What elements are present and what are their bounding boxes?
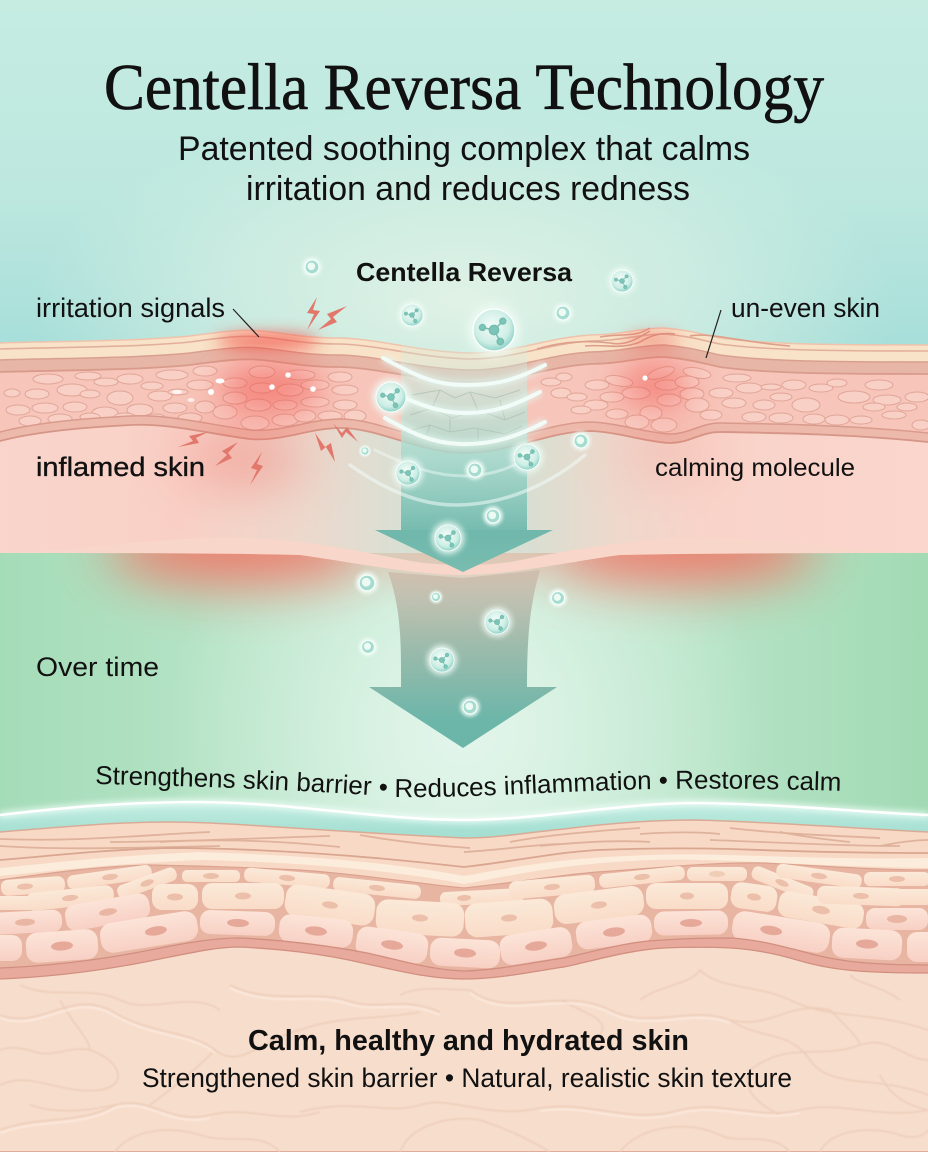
flaky ridges on uneven skin — [537, 328, 790, 349]
label: inflamed skin: inflamed skin — [36, 452, 205, 482]
red inflammation glows — [183, 333, 711, 480]
result details: Strengthened skin barrier • Natural, realistic skin texture — [142, 1063, 792, 1093]
label: irritation signals: irritation signals — [36, 293, 225, 323]
red glow at top of green panel — [105, 512, 820, 585]
skin layer: dark band — [0, 345, 928, 573]
subtitle — [178, 130, 750, 208]
icon: molecules and bubbles — [302, 257, 636, 717]
white inflammation particles — [172, 372, 648, 402]
label: Centella Reversa: Centella Reversa — [356, 257, 573, 287]
label: un-even skin: un-even skin — [731, 293, 880, 323]
epidermis cells — [4, 364, 928, 432]
healthy skin: cream highlight — [0, 852, 928, 884]
icon: lightning bolts for irritation — [178, 297, 358, 485]
title: Centella Reversa Technology — [104, 51, 824, 124]
panel: healthy skin cross-section — [0, 820, 928, 990]
panel: irritated skin cross-section — [0, 328, 928, 585]
healthy skin: fibre lines — [0, 828, 928, 852]
healthy skin: cells — [0, 863, 928, 969]
skin layer: cream surface — [0, 328, 928, 556]
faded cell outlines inside the shaft — [405, 390, 525, 446]
healthy skin: cell bed — [0, 863, 928, 990]
skin wrinkle texture — [0, 970, 928, 1152]
white wave glow — [383, 358, 545, 444]
panel: green over-time section — [0, 553, 928, 853]
label: Over time: Over time — [36, 652, 159, 682]
healthy skin: surface layer — [0, 820, 928, 990]
calming wave arrow: upper shaft — [401, 340, 527, 532]
healthy skin: stripe line — [0, 848, 928, 867]
pointer line: un-even skin — [706, 310, 721, 358]
label: calming molecule: calming molecule — [655, 454, 855, 482]
curved benefits text: Strengthens skin barrier • Reduces inflammation • Restores calm — [96, 766, 840, 798]
background: teal upper panel — [0, 0, 928, 420]
pink crescent divider — [0, 538, 928, 575]
skin layer: basal band — [0, 416, 928, 547]
skin line: surface stripe — [0, 334, 928, 359]
pointer line: irritation signals — [233, 309, 259, 337]
arrow: first downward arrow head — [375, 530, 553, 572]
glowing line halo — [0, 802, 928, 820]
skin layer: cell bed — [0, 357, 928, 585]
panel: dermis base with natural skin texture — [0, 947, 928, 1152]
arrow: second downward arrow — [369, 570, 557, 748]
glowing white barrier line — [0, 802, 928, 820]
heading: result: Calm, healthy and hydrated skin — [248, 1025, 689, 1057]
teal band under glowing line — [0, 802, 928, 860]
healthy skin: basal membrane — [0, 938, 928, 990]
panel: pink dermis below skin — [0, 425, 928, 556]
subtitle: Patented soothing complex that calms — [178, 130, 750, 168]
subtitle: irritation and reduces redness — [246, 170, 690, 208]
white calming waves — [350, 358, 585, 505]
